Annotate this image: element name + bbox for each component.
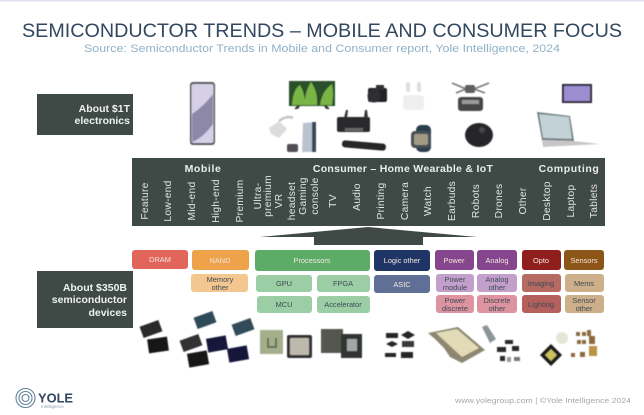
GPU: GPU — [276, 279, 292, 288]
Analog: Analog — [485, 256, 509, 265]
Power module — [436, 274, 474, 292]
icon: earbuds — [403, 82, 424, 110]
Opto: Opto — [533, 256, 549, 265]
Power module: module — [443, 283, 467, 292]
Sensor other: Sensor — [572, 296, 596, 305]
Logic other: Logic other — [384, 256, 421, 265]
Analog other: other — [489, 283, 506, 292]
label: about $350B semiconductor devices — [37, 271, 133, 328]
category labels: Camera — [400, 182, 411, 220]
Power discrete: Power — [445, 296, 466, 305]
icon: laptop — [537, 112, 600, 147]
Imaging: Imaging — [528, 279, 554, 288]
category labels: Ultra- — [253, 183, 264, 209]
label: about $350B semiconductor devices: semiconductor — [52, 294, 127, 306]
Sensor other — [565, 295, 604, 313]
Power — [435, 250, 474, 270]
Sensors: Sensors — [570, 256, 598, 265]
ASIC — [374, 275, 430, 293]
Analog — [477, 250, 517, 270]
logic chips — [385, 331, 415, 358]
category labels: Mid-end — [187, 182, 198, 220]
power module — [428, 325, 496, 363]
GPU — [256, 275, 312, 292]
label: about $350B semiconductor devices: devices — [88, 307, 127, 319]
heading: Computing: Computing — [539, 163, 599, 175]
Processors — [255, 250, 370, 271]
Discrete other: Discrete — [483, 296, 511, 305]
category labels: Printing — [376, 183, 387, 219]
ASIC: ASIC — [393, 280, 411, 289]
category labels: Low-end — [163, 180, 174, 222]
Discrete other — [477, 295, 517, 313]
icon: TV — [289, 81, 335, 109]
processor chips — [260, 329, 362, 358]
Analog other — [477, 274, 517, 292]
discrete parts — [497, 340, 520, 362]
Imaging — [522, 274, 561, 292]
Logic other — [374, 250, 430, 271]
category labels: TV — [328, 194, 339, 208]
Mems: Mems — [574, 279, 594, 288]
logo mark — [16, 388, 35, 408]
Lighting: Lighting — [528, 300, 554, 309]
arrow: up — [260, 227, 477, 245]
category labels: premium — [263, 175, 274, 217]
label: about $350B semiconductor devices: About $350B — [63, 282, 127, 294]
category labels: Audio — [352, 183, 363, 211]
footer: website and copyright: www.yolegroup.com | ©Yole Intelligence 2024 — [454, 396, 631, 405]
category labels: Feature — [140, 182, 151, 220]
icon: watch — [411, 125, 431, 152]
category labels: console — [310, 177, 321, 215]
icon: VR headset — [269, 117, 293, 138]
category labels: Earbuds — [447, 181, 458, 221]
Processors: Processors — [294, 256, 331, 265]
NAND — [192, 250, 249, 270]
Accelerator — [317, 296, 370, 313]
icon: game console — [287, 122, 316, 152]
icon: phone — [190, 82, 215, 145]
category labels: Robots — [471, 184, 482, 218]
logo: Yole Intelligence — [16, 388, 73, 409]
category labels: Drones — [494, 184, 505, 218]
icon: robot vacuum — [465, 123, 493, 147]
icon: camera — [368, 85, 387, 102]
icon: drone — [452, 83, 489, 111]
icon: printer — [337, 110, 370, 132]
category labels: VR — [274, 194, 285, 208]
DRAM — [132, 250, 188, 269]
icon: tablet — [562, 84, 592, 103]
NAND: NAND — [210, 256, 230, 265]
category labels — [140, 175, 600, 223]
Sensor other: other — [576, 304, 593, 313]
device images — [190, 81, 600, 152]
chip images — [140, 311, 597, 368]
category labels: High-end — [211, 179, 222, 223]
Accelerator: Accelerator — [324, 300, 362, 309]
FPGA: FPGA — [333, 279, 353, 288]
Power module: Power — [445, 275, 466, 284]
panel: application categories bar — [132, 158, 605, 226]
category labels: Watch — [423, 186, 434, 216]
category labels: Premium — [235, 180, 246, 222]
Memory other: Memory — [207, 275, 234, 284]
logo: Yole Intelligence: Intelligence — [41, 404, 64, 409]
Opto — [522, 250, 561, 270]
heading: Mobile: Mobile — [185, 163, 221, 175]
Power discrete — [436, 295, 474, 313]
Discrete other: other — [489, 304, 506, 313]
category labels: Laptop — [566, 184, 577, 218]
memory chips — [140, 311, 254, 368]
Memory other: other — [212, 283, 229, 292]
category labels: Desktop — [542, 181, 553, 221]
logo: Yole Intelligence: YOLE — [38, 390, 73, 406]
DRAM: DRAM — [149, 255, 171, 264]
subtitle: source: Source: Semiconductor Trends in Mobile and Consumer report, Yole Intelligence, 2024 — [84, 43, 560, 55]
label: about $1T electronics: About $1T — [79, 103, 131, 115]
Mems — [565, 274, 604, 292]
category labels: headset — [287, 182, 298, 220]
category labels: Other — [518, 187, 529, 215]
MCU — [257, 296, 312, 313]
label: about $1T electronics: electronics — [75, 115, 130, 127]
Sensors — [564, 250, 604, 270]
Analog other: Analog — [485, 275, 509, 284]
MCU: MCU — [276, 300, 292, 309]
category labels: Gaming — [298, 177, 309, 215]
opto and sensor parts — [540, 330, 597, 366]
title: SEMICONDUCTOR TRENDS – MOBILE AND CONSUMER FOCUS — [22, 20, 622, 42]
Memory other — [191, 274, 248, 292]
panel: semiconductor device categories — [132, 250, 604, 313]
Power: Power — [444, 256, 465, 265]
icon: soundbar — [342, 140, 386, 151]
Lighting — [522, 295, 561, 313]
heading: Consumer: Consumer – Home Wearable & IoT — [313, 163, 493, 175]
label: about $1T electronics — [37, 94, 133, 135]
category labels: Tablets — [589, 184, 600, 218]
FPGA — [317, 275, 370, 292]
Power discrete: discrete — [442, 304, 468, 313]
